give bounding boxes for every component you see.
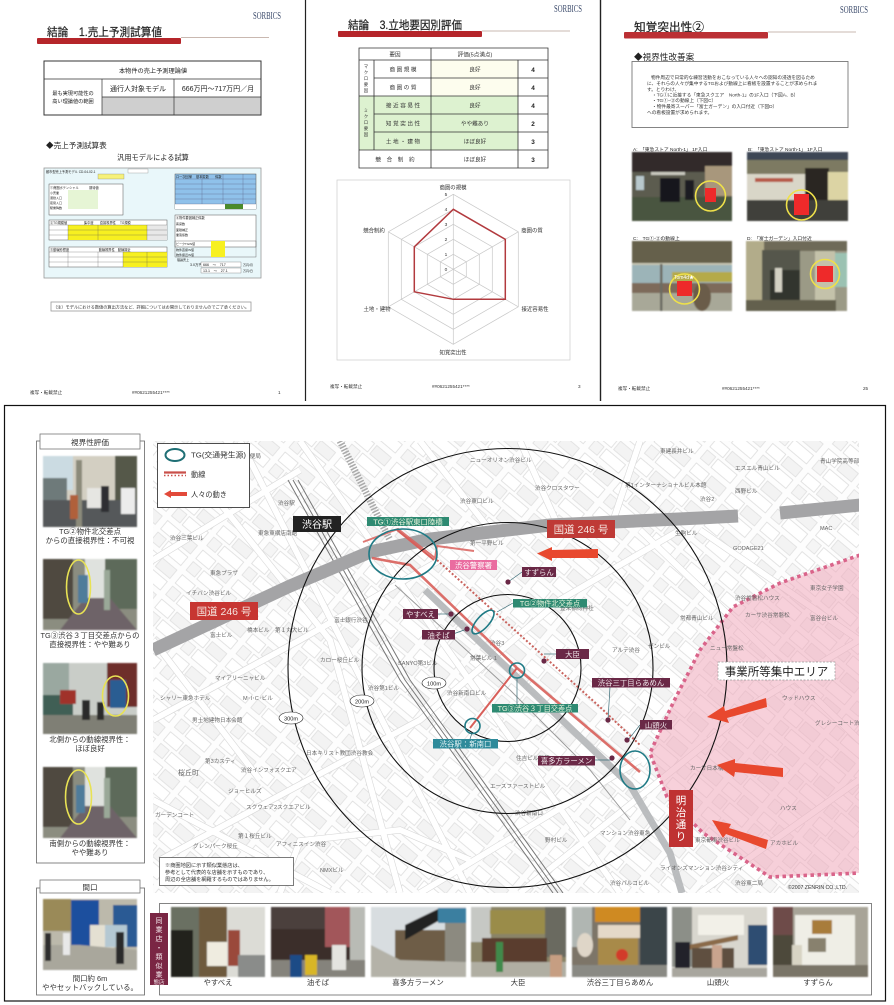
photo: north view bbox=[43, 663, 137, 753]
map note: 周辺の全店舗を網羅するものではありません。 bbox=[165, 875, 274, 883]
footer: 複写・転載禁止 bbox=[618, 385, 651, 392]
label: route 246 east bbox=[547, 520, 615, 538]
note box bbox=[51, 302, 251, 311]
spreadsheet: 業態係数 bbox=[176, 232, 188, 237]
spreadsheet: 物件接近IN値 bbox=[176, 252, 194, 257]
map labels: 第一平野ビル bbox=[470, 539, 504, 547]
evaluation table: マ bbox=[364, 64, 369, 70]
heading: sales forecast: 結論 1.売上予測試算値 bbox=[47, 25, 162, 39]
store photo: Aburasoba bbox=[271, 907, 365, 987]
evaluation table bbox=[359, 48, 548, 168]
arrow: people movement toward route 246 bbox=[537, 547, 598, 561]
evaluation table: 知 覚 突 出 性 bbox=[386, 120, 420, 128]
evaluation table: ク bbox=[364, 114, 368, 120]
leader lines bbox=[438, 572, 640, 760]
map labels: 東京都東渋谷ビル bbox=[695, 836, 740, 844]
map labels: 東京女子学園 bbox=[810, 584, 844, 592]
map labels: 渋谷クロスタワー bbox=[535, 484, 580, 492]
map labels: ライオンズマンション渋谷シティ bbox=[660, 864, 743, 872]
footer bbox=[330, 383, 581, 390]
evaluation table: 4 bbox=[531, 67, 535, 74]
radar chart: 商圏の質 bbox=[521, 226, 543, 234]
evaluation table: 4 bbox=[531, 103, 535, 110]
road: route 246 east section bbox=[780, 505, 860, 513]
map note bbox=[160, 858, 294, 886]
radar chart: 接近容易性 bbox=[522, 305, 549, 313]
photo: north view: 北側からの動線視界性： bbox=[49, 735, 131, 744]
label: office concentration area: 事業所等集中エリア bbox=[725, 664, 828, 678]
label: Aburasoba: 油そば bbox=[427, 631, 450, 640]
panel: visibility improvement page bbox=[600, 0, 869, 401]
distance pill: 100m bbox=[422, 677, 446, 689]
evaluation table: 土 地 ・ 建 物 bbox=[386, 138, 420, 146]
map labels: エスエル青山ビル bbox=[735, 464, 780, 472]
spreadsheet: 小売業 bbox=[50, 190, 59, 195]
railway bbox=[288, 441, 682, 893]
map labels: 富士ビル bbox=[210, 631, 233, 639]
map labels: カーサ渋谷常磐松 bbox=[745, 611, 790, 619]
map labels: 東急プラザ bbox=[210, 569, 238, 577]
evaluation table: 要因 bbox=[389, 52, 401, 58]
spreadsheet: 3.0万円 bbox=[190, 263, 203, 267]
evaluation table: 4 bbox=[531, 85, 535, 92]
map labels: 第１桜丘ビル bbox=[238, 832, 272, 840]
office area boundary bbox=[650, 555, 860, 877]
side label: 業 bbox=[156, 925, 162, 934]
improvement text box: 物件周辺で日常的な練習活動をおこなっている人々への認知の浸透を図るため bbox=[651, 74, 815, 81]
store photo: Santoka: 山頭火 bbox=[707, 978, 730, 987]
photo C bbox=[632, 235, 732, 311]
map labels: マイアリーニャビル bbox=[215, 674, 266, 682]
map labels: 渋谷第1ビル bbox=[368, 684, 399, 692]
trade-area map bbox=[153, 441, 866, 893]
spreadsheet: ②TG規模値 集中度 直接視界性 TG規模 bbox=[50, 220, 132, 225]
map labels: グレンパーク桜丘 bbox=[193, 842, 238, 850]
forecast result table bbox=[44, 61, 261, 115]
side label: 似 bbox=[156, 962, 162, 970]
map labels: カロー桜丘ビル bbox=[320, 656, 360, 664]
radar chart: 3 bbox=[445, 222, 448, 228]
label: Meiji-dori: 治 bbox=[676, 806, 687, 819]
map labels: ジョーヒルズ bbox=[228, 787, 262, 795]
improvement text box: ・TG①に近接する「東急スクエア North-1」の1F入口（下図A、B） bbox=[652, 92, 798, 98]
map labels: 渋谷郵便局 bbox=[233, 452, 261, 460]
evaluation table: ロ bbox=[364, 76, 368, 81]
distance pill: 100m: 100m bbox=[427, 682, 441, 688]
photo A bbox=[632, 146, 732, 221]
legend bbox=[158, 444, 250, 508]
footer: 25 bbox=[863, 386, 869, 391]
improvement text box: に、それらの人々が集中するTGおよび動線上に看板を設置することが求められま bbox=[647, 80, 818, 87]
evaluation table: ほぼ良好 bbox=[464, 138, 487, 146]
label: police station: 渋谷警察署 bbox=[455, 561, 492, 570]
improvement text box bbox=[632, 62, 848, 128]
map labels: 渋谷新南口 bbox=[515, 809, 543, 817]
map labels: 渋谷東口ビル bbox=[460, 497, 494, 505]
circles: 100m 200m 300m bbox=[288, 448, 727, 888]
footer: 複写・転載禁止 bbox=[330, 383, 363, 390]
improvement text box: への看板設置が求められます。 bbox=[647, 109, 712, 116]
legend: TG(交通発生源) bbox=[191, 450, 246, 460]
radar chart: 知覚突出性 bbox=[440, 348, 467, 356]
caption: frontage bbox=[42, 974, 138, 992]
map labels: シャリー東急ホテル bbox=[160, 694, 211, 702]
evaluation table: 良好 bbox=[469, 84, 481, 92]
photo D bbox=[746, 235, 847, 311]
map labels: 富士銀行渋谷 bbox=[334, 616, 368, 624]
store photo: Daijin: 大臣 bbox=[511, 978, 525, 987]
photo C: C: TG①-②の動線上 bbox=[633, 235, 680, 242]
map labels: 第1インターナショナルビル本館 bbox=[625, 481, 707, 489]
improvement text box: ・物件最寄スーパー「富士ガーデン」の入口付近（下図D） bbox=[652, 103, 777, 110]
photo D: D: 「富士ガーデン」入口付近 bbox=[747, 235, 812, 242]
spreadsheet: 理論売上 bbox=[177, 257, 189, 262]
heading: evaluation: 結論 3.立地要因別評価 bbox=[348, 18, 462, 32]
photo C: Tom4d★ bbox=[674, 275, 694, 281]
distance pill: 200m: 200m bbox=[355, 700, 369, 706]
label: Aburasoba bbox=[422, 630, 455, 640]
panel: visibility evaluation bbox=[36, 434, 144, 863]
photo: storefront bbox=[43, 899, 137, 970]
footer: ##0621255421**** bbox=[722, 386, 760, 391]
side label: 類 bbox=[156, 952, 162, 961]
label: Meiji-dori: り bbox=[676, 831, 686, 843]
photo: south view bbox=[43, 767, 137, 857]
distance pill: 200m bbox=[350, 695, 374, 707]
logo: SORBICS: SORBICS bbox=[253, 10, 281, 22]
panel: sales forecast page bbox=[0, 0, 303, 400]
map labels: 桜丘町 bbox=[178, 768, 199, 777]
map labels: SANYO第3ビル bbox=[398, 659, 438, 667]
road: route 246 bbox=[153, 516, 738, 650]
store photo: Kitakata ramen: 喜多方ラーメン bbox=[392, 978, 444, 987]
footer: ##0621255421**** bbox=[432, 384, 470, 389]
forecast result table: 通行人対象モデル bbox=[110, 84, 166, 93]
side label bbox=[150, 913, 168, 986]
evaluation table: 商 圏 の 質 bbox=[389, 84, 417, 92]
spreadsheet: ①商圏ポテンシャル 期待値 bbox=[50, 185, 100, 190]
label: Santoka bbox=[640, 720, 672, 730]
improvement text box: す。とりわけ、 bbox=[647, 86, 679, 93]
map labels: 常都青山ビル bbox=[680, 614, 714, 622]
label: TG1: TG①渋谷駅東口陸橋 bbox=[373, 518, 443, 526]
panel header bbox=[40, 434, 140, 449]
label: TG3: TG③渋谷３丁目交差点 bbox=[498, 704, 572, 713]
map labels: ハウス bbox=[780, 804, 797, 812]
map labels: 渋谷新南口ビル bbox=[447, 689, 487, 697]
store photo: Santoka bbox=[672, 907, 767, 987]
label: Meiji-dori: 通 bbox=[676, 819, 687, 831]
map labels: 渋谷三葉ビル bbox=[170, 534, 204, 542]
evaluation table: 良好 bbox=[469, 66, 481, 74]
map labels: 生駒ビル bbox=[675, 529, 698, 537]
heading bar bbox=[37, 38, 269, 44]
map labels: 橋本ビル bbox=[247, 626, 270, 634]
arrow: office area 1 bbox=[707, 698, 767, 723]
panel header: 視界性評価 bbox=[71, 437, 109, 447]
store photo: Yasubee: やすべえ bbox=[203, 978, 233, 987]
map labels: MAC bbox=[820, 526, 832, 532]
improvement text box: ・TG①−②の動線上（下図C） bbox=[652, 97, 716, 104]
footer: 1 bbox=[278, 390, 281, 395]
map labels: ガーデンコート bbox=[155, 811, 194, 819]
label: Yasubee: やすべえ bbox=[406, 610, 435, 619]
radar chart: 4 bbox=[445, 207, 448, 213]
map labels: 渋谷東二局 bbox=[735, 879, 763, 887]
store photo: Suzuran: すずらん bbox=[803, 978, 833, 987]
evaluation table: 2 bbox=[531, 121, 535, 128]
forecast result table: 最も実現可能性の bbox=[52, 89, 94, 97]
TG ellipses bbox=[369, 529, 650, 789]
spreadsheet: 物件直接IN値 bbox=[176, 247, 194, 252]
map labels: 渋谷駅 bbox=[278, 499, 295, 507]
photo: south view: 南側からの動線視界性： bbox=[49, 839, 131, 848]
map labels: 住吉ビル新館 bbox=[516, 754, 550, 762]
map labels: 豊栄稲荷神社 bbox=[560, 604, 594, 612]
evaluation table: ク bbox=[364, 70, 368, 76]
map note: ※商圏地図に示す類似業態店は、 bbox=[165, 861, 243, 869]
photo: TG2 view: からの直接視界性：不可視 bbox=[46, 536, 135, 545]
side label: 店 bbox=[156, 935, 162, 943]
map labels: ウッドハウス bbox=[782, 694, 816, 702]
logo: SORBICS: SORBICS bbox=[840, 4, 868, 16]
spreadsheet: 客席数 bbox=[176, 221, 185, 226]
forecast result table: 本物件の売上予測理論値 bbox=[119, 67, 187, 75]
evaluation table: 接 近 容 易 性 bbox=[386, 102, 420, 110]
spreadsheet: ③動線影響度 動線視界性 動線接近 bbox=[50, 247, 131, 252]
label: TG2: TG②物件北交差点 bbox=[520, 599, 580, 608]
subheading: improvement plan: ◆視界性改善案 bbox=[634, 51, 695, 62]
spreadsheet: ピークTGIN値 bbox=[176, 241, 195, 246]
evaluation table: 因 bbox=[364, 88, 369, 94]
map labels: ニューオリオン渋谷ビル bbox=[470, 456, 532, 464]
spreadsheet: 13.1 〜 27.1 bbox=[203, 269, 228, 273]
map labels bbox=[155, 447, 866, 887]
subheading: forecast table: ◆売上予測試算表 bbox=[46, 140, 107, 150]
evaluation table: 評価(5点満点) bbox=[458, 50, 493, 58]
map labels: アカホビル bbox=[770, 839, 798, 847]
map labels: 野村ビル bbox=[545, 836, 568, 844]
store photo: Kitakata ramen bbox=[371, 907, 466, 987]
photo: south view: やや難あり bbox=[72, 848, 108, 857]
map labels: M･I･C･ビル bbox=[243, 694, 273, 702]
map labels: 東建長井ビル bbox=[660, 447, 694, 455]
map labels: NMXビル bbox=[320, 866, 344, 874]
photo: TG3 view: 直接視界性：やや難あり bbox=[49, 640, 131, 649]
panel header: 間口 bbox=[82, 883, 98, 892]
evaluation table: ロ bbox=[364, 120, 368, 125]
footer bbox=[30, 389, 281, 396]
spreadsheet: 夜間人口 bbox=[50, 200, 62, 205]
side label: 態店 bbox=[153, 978, 165, 986]
map labels: アフィニスイン渋谷 bbox=[276, 840, 327, 848]
store photo: Yasubee bbox=[171, 907, 265, 987]
copyright: ©2007 ZENRIN CO.,LTD. bbox=[788, 884, 847, 891]
label: route 246 west: 国道 246 号 bbox=[197, 605, 251, 618]
label: Meiji-dori: 明 bbox=[676, 795, 686, 807]
store photo: Shibuya 3-chome ramen bbox=[572, 907, 667, 987]
arrow: office area 3 bbox=[712, 820, 768, 849]
map labels: 東急東横店南館 bbox=[258, 529, 298, 537]
label: Shibuya station: 渋谷駅 bbox=[302, 518, 332, 531]
side label: 業 bbox=[156, 970, 162, 979]
radar chart bbox=[337, 180, 570, 360]
panel: Shibuya trade-area map sheet bbox=[4, 406, 886, 1001]
distance pill: 300m bbox=[279, 712, 303, 724]
evaluation table: 要 bbox=[364, 82, 369, 88]
legend: 動線 bbox=[191, 470, 205, 479]
label: Santoka: 山頭火 bbox=[645, 721, 668, 730]
panel: location factor evaluation page bbox=[306, 0, 582, 401]
map labels: 渋谷パルコビル bbox=[610, 879, 649, 887]
photo: TG2 view: TG②物件北交差点 bbox=[59, 527, 122, 536]
map labels: 第１丸大ビル bbox=[275, 626, 309, 634]
label: Suzuran: すずらん bbox=[524, 568, 554, 577]
map labels: 日本キリスト教団渋谷教会 bbox=[306, 749, 374, 757]
legend: 人々の動き bbox=[191, 490, 227, 499]
label: route 246 east: 国道 246 号 bbox=[554, 523, 608, 536]
radar chart: 競合制約 bbox=[363, 226, 385, 234]
store photo: Suzuran bbox=[773, 907, 868, 987]
store photo: Shibuya 3-chome ramen: 渋谷三丁目らあめん bbox=[587, 978, 653, 987]
radar chart: 土地・建物 bbox=[364, 305, 391, 313]
label: Shibuya station bbox=[293, 516, 341, 532]
spreadsheet: 駅乗降数 bbox=[50, 205, 62, 210]
label: new south exit: 渋谷駅：新南口 bbox=[440, 740, 491, 748]
label: route 246 west bbox=[190, 602, 258, 620]
map labels: 渋谷3 bbox=[490, 639, 504, 647]
spreadsheet: 万円/日 bbox=[243, 269, 253, 273]
map labels: GODAGE21 bbox=[733, 546, 764, 552]
side label: 同 bbox=[156, 917, 162, 925]
heading: perceptual prominence: 知覚突出性② bbox=[634, 20, 705, 34]
map labels: 男土地建物日本会館 bbox=[192, 716, 243, 724]
spreadsheet: 666 〜 717 bbox=[203, 263, 226, 267]
photo B: B: 「東急ストア North-1」 1F入口 bbox=[748, 146, 823, 153]
radar chart: 5 bbox=[445, 192, 448, 198]
photo: TG2 view bbox=[43, 456, 137, 545]
caption: frontage: ややセットバックしている。 bbox=[42, 983, 138, 992]
evaluation table: 3 bbox=[531, 157, 535, 164]
map labels: アルテ渋谷 bbox=[612, 646, 640, 654]
spreadsheet: ロ一次回帰 基本変数 係数 bbox=[176, 174, 222, 179]
note box: （注）モデルにおける数値の算出方法など、詳細についてはお開示しておりませんのでご了承ください。 bbox=[53, 304, 249, 310]
evaluation table: 3 bbox=[531, 139, 535, 146]
photo B bbox=[747, 146, 848, 221]
map labels: 常葉ビル 1 bbox=[470, 654, 497, 662]
evaluation table: 競 合 制 約 bbox=[375, 156, 415, 164]
map labels: 富谷台ビル bbox=[810, 614, 838, 622]
evaluation table: 因 bbox=[364, 132, 369, 138]
evaluation table: 良好 bbox=[469, 102, 481, 110]
photo A: A: 「東急ストア North-1」 1F入口 bbox=[633, 146, 708, 153]
office concentration area bbox=[650, 555, 860, 877]
store photo: Daijin bbox=[471, 907, 566, 987]
map labels: グレシーコート渋谷 bbox=[815, 719, 866, 727]
map labels: 渋谷常磐松ハウス bbox=[735, 594, 780, 602]
map note: 参考として代表的な店舗を示すものであり、 bbox=[165, 868, 268, 876]
label: office concentration area bbox=[718, 662, 835, 680]
map labels: 第3カスティ bbox=[205, 757, 236, 765]
map labels: カーサ日本橋 bbox=[690, 764, 724, 772]
photo: TG3 view: TG③渋谷３丁目交差点からの bbox=[41, 631, 139, 640]
map labels: 渋谷2 bbox=[700, 495, 714, 503]
footer: 3 bbox=[578, 384, 581, 389]
evaluation table: ミ bbox=[364, 108, 368, 113]
side label: ・ bbox=[156, 945, 162, 952]
evaluation table: ほぼ良好 bbox=[464, 156, 487, 164]
radar data line bbox=[414, 209, 505, 299]
label: Shibuya 3-chome ramen: 渋谷三丁目らあめん bbox=[598, 678, 664, 688]
map labels: スクウェア2スクエアビル bbox=[246, 803, 311, 811]
heading bar bbox=[624, 32, 856, 38]
photo: north view: ほぼ良好 bbox=[75, 744, 105, 753]
forecast result table: 666万円～717万円／月 bbox=[182, 85, 254, 93]
evaluation table: 要 bbox=[364, 126, 369, 132]
spreadsheet: 通勤人口 bbox=[50, 195, 62, 200]
label: Daijin: 大臣 bbox=[565, 650, 580, 659]
footer: ##0621255421**** bbox=[132, 390, 170, 395]
map labels: ニュー常盤松 bbox=[710, 644, 744, 652]
map labels: ゼンビル bbox=[648, 642, 671, 650]
photo: TG3 view bbox=[41, 559, 139, 649]
map labels: エースファーストビル bbox=[490, 782, 546, 790]
evaluation table: やや難あり bbox=[461, 120, 489, 128]
map labels: 渋谷インフォスクエア bbox=[241, 766, 297, 774]
panel: frontage bbox=[36, 880, 144, 995]
map labels: マンション渋谷東急 bbox=[600, 829, 651, 837]
subheading: general model: 汎用モデルによる試算 bbox=[117, 153, 189, 162]
store markers bbox=[448, 579, 630, 761]
arrow: office area 2 bbox=[717, 759, 783, 777]
caption: frontage: 間口約 6m bbox=[73, 974, 107, 983]
map labels: 西野ビル bbox=[735, 487, 758, 495]
panel: competing stores bbox=[150, 904, 872, 995]
store photo: Aburasoba: 油そば bbox=[307, 978, 330, 987]
radar chart: 商圏の規模 bbox=[440, 184, 467, 192]
spreadsheet: ④物件要因補正係数 bbox=[176, 215, 205, 220]
map labels: 青山学院高等部 bbox=[820, 457, 860, 465]
spreadsheet bbox=[44, 168, 261, 278]
spreadsheet: 面積補正 bbox=[176, 227, 188, 232]
distance pill: 300m: 300m bbox=[284, 716, 298, 722]
footer: 複写・転載禁止 bbox=[30, 389, 63, 396]
spreadsheet: 万円/月 bbox=[243, 263, 253, 267]
label: Kitakata ramen: 喜多方ラーメン bbox=[541, 756, 592, 766]
radar chart: 0 bbox=[445, 267, 448, 273]
label: Daijin bbox=[556, 649, 589, 659]
logo: SORBICS: SORBICS bbox=[554, 3, 582, 15]
evaluation table: 商 圏 規 模 bbox=[389, 66, 417, 74]
footer bbox=[618, 385, 869, 392]
radar chart: 1 bbox=[445, 252, 448, 258]
route lines bbox=[363, 529, 640, 772]
forecast result table: 高い理論値の範囲 bbox=[52, 97, 94, 105]
heading bar bbox=[338, 31, 570, 37]
label: Meiji-dori bbox=[669, 790, 693, 847]
radar chart: 2 bbox=[445, 237, 448, 243]
map labels: イチバン渋谷ビル bbox=[186, 589, 231, 597]
spreadsheet: 都市型売上予測モデル CD-04-02-1 bbox=[46, 169, 96, 174]
